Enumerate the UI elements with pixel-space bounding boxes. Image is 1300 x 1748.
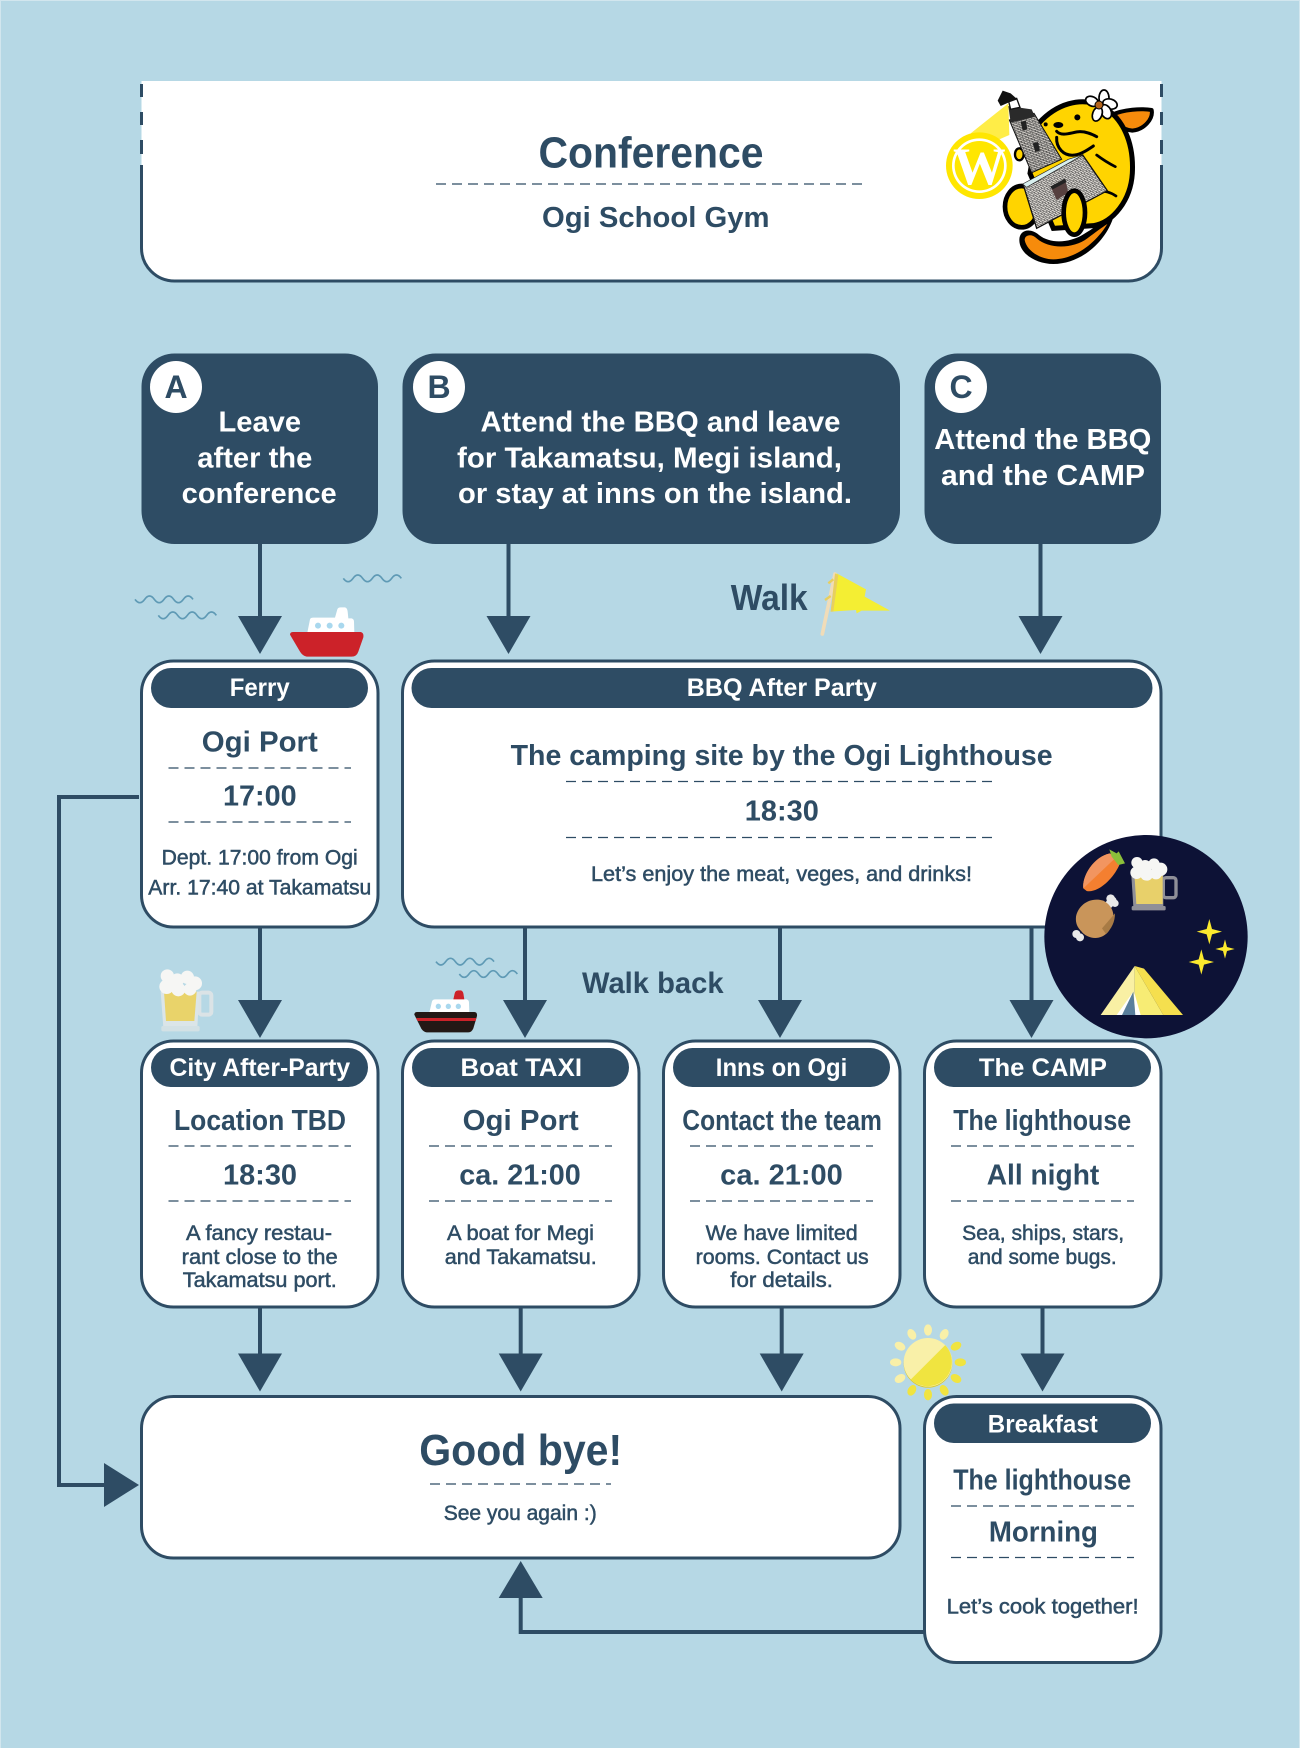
text: time: ca. 21:00 — [459, 1160, 581, 1192]
arrow: Ferry to City After-Party — [238, 927, 282, 1038]
arrow: B to BBQ — [486, 544, 530, 654]
text: details: We have limited — [706, 1222, 858, 1245]
connector: Breakfast to Good bye — [499, 1561, 924, 1632]
text: details: rooms. Contact us — [696, 1246, 869, 1269]
text: details: for details. — [730, 1269, 833, 1292]
heading pill: BBQ After Party — [412, 668, 1152, 708]
text: time: ca. 21:00 — [720, 1160, 843, 1192]
icon: sparkles — [1189, 919, 1235, 975]
panel: option B — [402, 354, 900, 544]
heading: Conference: Conference — [538, 128, 764, 178]
text: details: Takamatsu port. — [183, 1269, 337, 1292]
icon: carrot — [1083, 849, 1125, 891]
panel: Ferry — [142, 661, 378, 927]
text: place: The lighthouse — [953, 1105, 1131, 1137]
panel: BBQ After Party — [402, 661, 1161, 927]
text: details — [148, 846, 371, 899]
panel: conference banner — [142, 81, 1162, 281]
icon: red ferry ship — [290, 607, 363, 657]
text: place: Ogi Port — [463, 1105, 579, 1137]
icon: wapuu mascot with lighthouse — [946, 90, 1152, 264]
icon: wapuu mascot with lighthouse: W — [953, 138, 1006, 196]
text: option A description: after the — [197, 442, 312, 474]
text: place: The camping site by the Ogi Lighthouse — [511, 740, 1053, 772]
text: details — [962, 1222, 1124, 1269]
text: option B description: or stay at inns on the island. — [458, 478, 852, 510]
heading pill: The CAMP: The CAMP — [979, 1054, 1107, 1082]
badge: A: A — [164, 369, 188, 405]
heading pill: City After-Party: City After-Party — [170, 1054, 350, 1082]
icon: yellow flag — [822, 573, 890, 634]
panel: The CAMP — [924, 1041, 1161, 1307]
text: place: Ogi Port — [202, 726, 318, 758]
icon: sun — [890, 1324, 966, 1400]
arrow: Boat to Good bye — [499, 1307, 543, 1392]
text: details — [696, 1222, 869, 1292]
text: details: and Takamatsu. — [445, 1246, 597, 1269]
heading pill: Boat TAXI — [412, 1048, 629, 1087]
arrow: Inns to Good bye — [760, 1307, 804, 1392]
text: details: A fancy restau- — [186, 1222, 332, 1245]
heading pill: Boat TAXI: Boat TAXI — [460, 1054, 582, 1082]
heading pill: Breakfast: Breakfast — [988, 1410, 1098, 1438]
panel: option A — [142, 354, 378, 544]
badge: B: B — [427, 369, 451, 405]
arrow: BBQ to CAMP — [1010, 927, 1054, 1038]
text: place: Contact the team — [682, 1105, 882, 1137]
panel: City After-Party — [142, 1041, 378, 1307]
heading: Good bye: Good bye! — [419, 1426, 622, 1475]
text: details: A boat for Megi — [447, 1222, 594, 1245]
arrow: City party to Good bye — [238, 1307, 282, 1392]
text: option C description: Attend the BBQ — [934, 424, 1151, 456]
text: place: Location TBD — [174, 1105, 346, 1137]
badge: C: C — [949, 369, 973, 405]
heading pill: Breakfast — [934, 1404, 1151, 1443]
text: time: 18:30 — [745, 796, 819, 828]
text: details: Arr. 17:40 at Takamatsu — [148, 876, 371, 899]
arrow: A to Ferry — [238, 544, 282, 654]
icon: black boat — [414, 990, 477, 1032]
text: time: Morning — [989, 1516, 1098, 1548]
arrow: BBQ to Boat TAXI — [503, 927, 547, 1038]
heading pill: Inns on Ogi: Inns on Ogi — [716, 1054, 847, 1082]
arrow: C to BBQ — [1018, 544, 1062, 654]
heading pill: The CAMP — [934, 1048, 1151, 1087]
label: Walk: Walk — [731, 577, 809, 618]
icon: waves near boat — [436, 958, 517, 977]
text: option B description: for Takamatsu, Megi island, — [457, 442, 842, 474]
heading pill: Ferry: Ferry — [230, 674, 290, 702]
icon: beer mug — [1130, 857, 1176, 910]
label: Walk back: Walk back — [582, 967, 724, 1000]
icon: beer mug near city party — [159, 969, 211, 1031]
text: venue: Ogi School Gym — [542, 202, 770, 234]
text: details: Dept. 17:00 from Ogi — [162, 846, 358, 869]
badge: A — [150, 361, 202, 413]
text: details: and some bugs. — [968, 1246, 1117, 1269]
panel: Boat TAXI — [402, 1041, 639, 1307]
connector: Ferry to Good bye — [59, 797, 139, 1507]
icon: tent — [1101, 966, 1183, 1015]
icon: chicken leg — [1072, 894, 1119, 941]
text: time: 17:00 — [223, 780, 297, 812]
icon: waves near ferry — [135, 575, 401, 619]
badge: B — [413, 361, 465, 413]
text: option C description: and the CAMP — [941, 460, 1145, 492]
text: option B description — [457, 406, 852, 510]
text: time: All night — [987, 1160, 1100, 1192]
text: details: rant close to the — [182, 1246, 338, 1269]
heading pill: BBQ After Party: BBQ After Party — [687, 674, 877, 702]
text: option A description: conference — [182, 478, 337, 510]
heading pill: Ferry — [151, 668, 368, 708]
heading pill: Inns on Ogi — [673, 1048, 890, 1087]
text: farewell: See you again :) — [444, 1502, 597, 1525]
text: option A description: Leave — [218, 406, 301, 438]
text: details: Let’s cook together! — [947, 1596, 1139, 1618]
text: details — [182, 1222, 338, 1292]
arrow: BBQ to Inns — [758, 927, 802, 1038]
panel: Inns on Ogi — [664, 1041, 900, 1307]
text: place: The lighthouse — [953, 1464, 1131, 1496]
arrow: CAMP to Breakfast — [1020, 1307, 1064, 1392]
text: details: Sea, ships, stars, — [962, 1222, 1124, 1245]
panel: Good bye — [142, 1396, 900, 1558]
text: option C description — [934, 424, 1151, 492]
panel: Breakfast — [924, 1396, 1161, 1662]
text: time: 18:30 — [223, 1160, 297, 1192]
badge: C — [935, 361, 987, 413]
text: option B description: Attend the BBQ and leave — [480, 406, 840, 438]
text: option A description — [182, 406, 337, 510]
icon: night circle with food, tent and stars — [1044, 835, 1248, 1038]
text: details: Let’s enjoy the meat, veges, and drinks! — [591, 863, 972, 886]
text: details — [445, 1222, 597, 1269]
panel: option C — [924, 354, 1161, 544]
heading pill: City After-Party — [151, 1048, 368, 1087]
